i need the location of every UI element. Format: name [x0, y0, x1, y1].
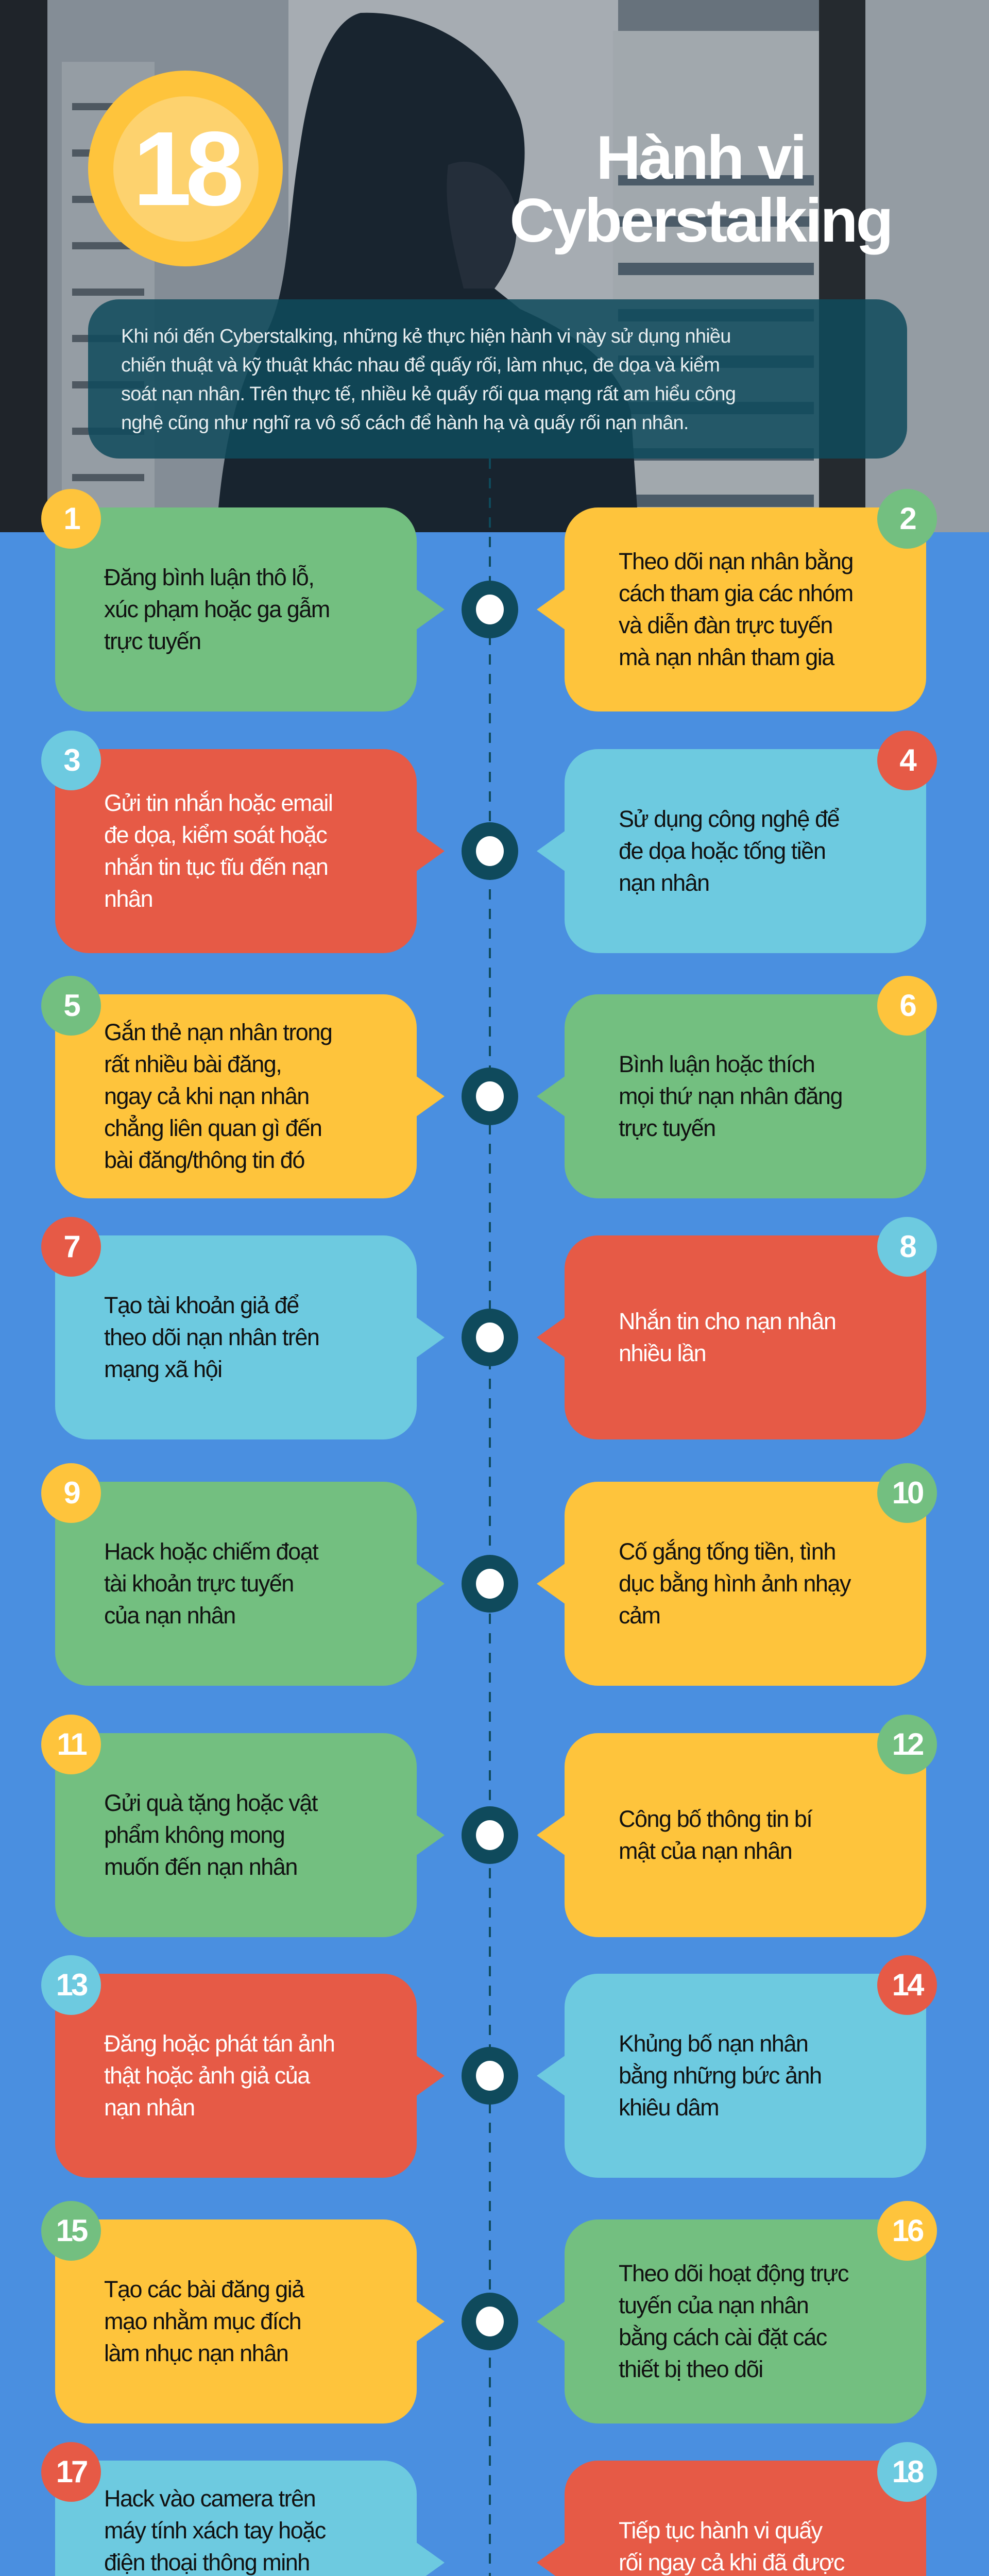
card 7	[41, 1217, 445, 1439]
card 2: cách tham gia các nhóm	[619, 580, 853, 606]
card 14: 14	[892, 1968, 922, 2002]
card 3: Gửi tin nhắn hoặc email	[104, 790, 332, 816]
card 16: Theo dõi hoạt động trực	[619, 2260, 848, 2286]
timeline dot 2	[462, 822, 518, 880]
card 11: Gửi quà tặng hoặc vật	[104, 1790, 317, 1816]
card 12: mật của nạn nhân	[619, 1838, 792, 1864]
card 18: rối ngay cả khi đã được	[619, 2549, 844, 2575]
card 13: nạn nhân	[104, 2094, 195, 2121]
card 11: 11	[57, 1727, 86, 1761]
card 2	[537, 489, 937, 711]
card 3: nhắn tin tục tĩu đến nạn	[104, 854, 328, 880]
card 7: 7	[63, 1229, 79, 1264]
card 10: cảm	[619, 1602, 660, 1629]
card 6: trực tuyến	[619, 1115, 715, 1141]
card 18: Tiếp tục hành vi quấy	[619, 2517, 822, 2544]
badge: 18: 18	[133, 109, 238, 228]
card 16: 16	[892, 2213, 922, 2248]
card 5	[41, 976, 445, 1198]
card 7: theo dõi nạn nhân trên	[104, 1324, 319, 1350]
card 2: Theo dõi nạn nhân bằng	[619, 548, 853, 574]
card 17: điện thoại thông minh	[104, 2549, 310, 2575]
card 9: của nạn nhân	[104, 1602, 235, 1629]
title	[509, 123, 892, 255]
header photo background	[0, 0, 989, 532]
card 16: bằng cách cài đặt các	[619, 2324, 827, 2350]
card 1: Đăng bình luận thô lỗ,	[104, 564, 314, 590]
card 8: 8	[899, 1229, 915, 1264]
card 2: và diễn đàn trực tuyến	[619, 612, 832, 638]
card 12: 12	[892, 1727, 922, 1761]
card 17: máy tính xách tay hoặc	[104, 2517, 326, 2544]
card 5: chẳng liên quan gì đến	[104, 1115, 321, 1141]
card 13: 13	[56, 1968, 86, 2002]
card 4: đe dọa hoặc tống tiền	[619, 838, 825, 864]
card 11: muốn đến nạn nhân	[104, 1854, 297, 1880]
card 14	[537, 1955, 937, 2178]
timeline dashed line	[489, 459, 491, 2576]
card 15: Tạo các bài đăng giả	[104, 2276, 304, 2302]
intro text box	[88, 299, 907, 459]
card 1: xúc phạm hoặc ga gẫm	[104, 596, 330, 622]
card 10: Cố gắng tống tiền, tình	[619, 1538, 835, 1565]
timeline dot 6	[462, 1806, 518, 1864]
card 5: Gắn thẻ nạn nhân trong	[104, 1019, 332, 1045]
card 4	[537, 731, 937, 953]
card 2: mà nạn nhân tham gia	[619, 644, 834, 670]
timeline dot 1	[462, 581, 518, 638]
card 11: phẩm không mong	[104, 1822, 284, 1848]
card 6: mọi thứ nạn nhân đăng	[619, 1083, 842, 1109]
card 12: Công bố thông tin bí	[619, 1806, 812, 1832]
card 13: Đăng hoặc phát tán ảnh	[104, 2030, 334, 2057]
card 5: 5	[63, 988, 79, 1023]
timeline dot 5	[462, 1555, 518, 1613]
card 17	[41, 2442, 445, 2576]
card 8	[537, 1217, 937, 1439]
card 14: Khủng bố nạn nhân	[619, 2030, 808, 2057]
intro text box: chiến thuật và kỹ thuật khác nhau để quấy rối, làm nhục, đe dọa và kiểm	[121, 354, 720, 376]
timeline dot 4	[462, 1309, 518, 1366]
card 1: 1	[63, 501, 79, 536]
card 8: Nhắn tin cho nạn nhân	[619, 1308, 835, 1334]
card 6	[537, 976, 937, 1198]
timeline dot 7	[462, 2047, 518, 2105]
card 15: làm nhục nạn nhân	[104, 2340, 288, 2366]
card 13: thật hoặc ảnh giả của	[104, 2062, 310, 2089]
card 9: Hack hoặc chiếm đoạt	[104, 1538, 318, 1565]
card 3	[41, 731, 445, 953]
card 10: 10	[892, 1476, 922, 1510]
timeline dot 8	[462, 2293, 518, 2350]
title: Cyberstalking	[509, 186, 892, 255]
card 8: nhiều lần	[619, 1340, 706, 1366]
card 11	[41, 1715, 445, 1937]
card 2: 2	[899, 501, 915, 536]
intro text box: Khi nói đến Cyberstalking, những kẻ thực hiện hành vi này sử dụng nhiều	[121, 326, 731, 347]
intro text box: nghệ cũng như nghĩ ra vô số cách để hành hạ và quấy rối nạn nhân.	[121, 412, 689, 434]
card 6: Bình luận hoặc thích	[619, 1051, 814, 1077]
card 14: bằng những bức ảnh	[619, 2062, 822, 2089]
card 16: thiết bị theo dõi	[619, 2356, 763, 2382]
card 15: mạo nhằm mục đích	[104, 2308, 301, 2334]
card 18: 18	[892, 2454, 922, 2489]
card 13	[41, 1955, 445, 2178]
card 16: tuyến của nạn nhân	[619, 2292, 808, 2318]
card 16	[537, 2201, 937, 2424]
card 7: Tạo tài khoản giả để	[104, 1292, 299, 1318]
title: Hành vi	[596, 123, 805, 192]
card 1: trực tuyến	[104, 628, 201, 654]
card 4: nạn nhân	[619, 870, 709, 896]
card 5: ngay cả khi nạn nhân	[104, 1083, 309, 1109]
card 4: 4	[899, 743, 915, 777]
card 17: Hack vào camera trên	[104, 2485, 315, 2512]
card 3: 3	[63, 743, 79, 777]
badge: 18	[88, 71, 283, 266]
card 12	[537, 1715, 937, 1937]
card 9: tài khoản trực tuyến	[104, 1570, 294, 1597]
card 17: 17	[56, 2454, 86, 2489]
card 15: 15	[56, 2213, 86, 2248]
card 5: bài đăng/thông tin đó	[104, 1147, 304, 1173]
card 15	[41, 2201, 445, 2424]
card 14: khiêu dâm	[619, 2094, 719, 2121]
card 3: đe dọa, kiểm soát hoặc	[104, 822, 327, 848]
card 5: rất nhiều bài đăng,	[104, 1051, 281, 1077]
card 1	[41, 489, 445, 711]
card 3: nhân	[104, 886, 152, 912]
intro text box: soát nạn nhân. Trên thực tế, nhiều kẻ quấy rối qua mạng rất am hiểu công	[121, 383, 736, 405]
card 9: 9	[63, 1476, 79, 1510]
card 10	[537, 1463, 937, 1686]
card 9	[41, 1463, 445, 1686]
timeline dot 3	[462, 1067, 518, 1125]
card 18	[537, 2442, 937, 2576]
card 4: Sử dụng công nghệ để	[619, 806, 839, 832]
card 7: mạng xã hội	[104, 1356, 222, 1382]
card 10: dục bằng hình ảnh nhạy	[619, 1570, 850, 1597]
card 6: 6	[899, 988, 915, 1023]
